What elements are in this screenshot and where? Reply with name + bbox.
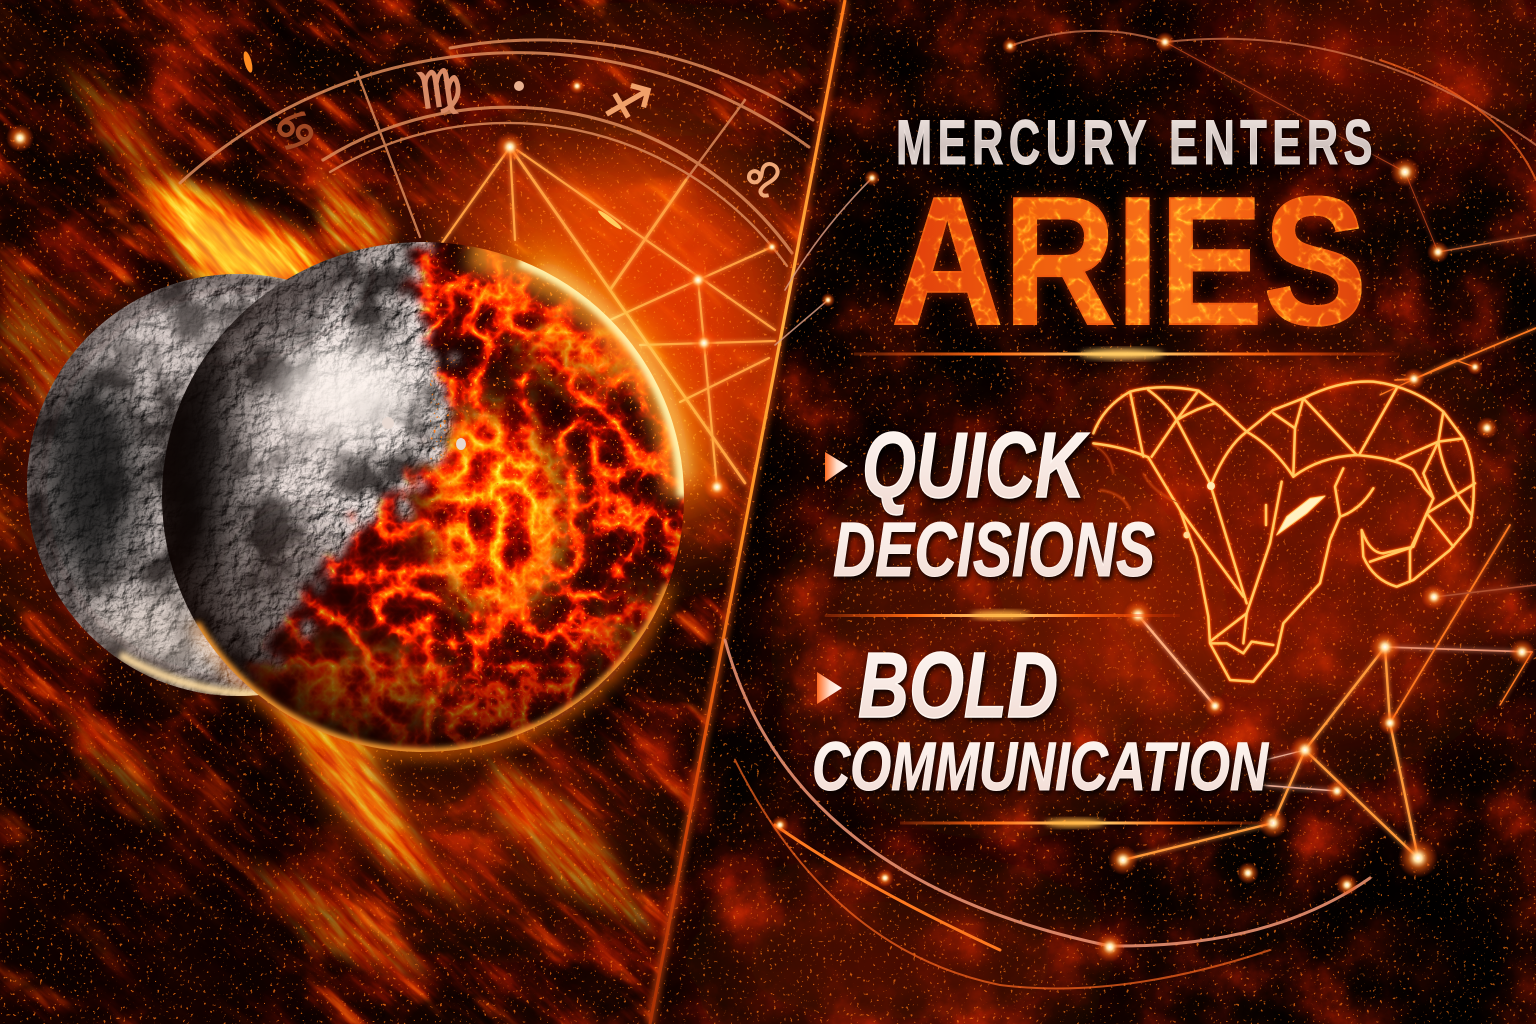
title: Aries: ARIES [891,158,1367,363]
wheel rings [180,40,813,266]
lower constellation lines [1123,42,1536,860]
lava specks [430,244,684,750]
grey rock surface [162,242,464,680]
right constellation stars [771,32,1535,962]
zodiac glyphs: ♌ [731,144,794,212]
text: Bold Communication [812,633,1270,805]
zodiac glyphs: ♋ [265,98,326,164]
text: Quick Decisions: QUICK [862,413,1089,517]
text: Quick Decisions [833,413,1155,593]
small comet lines [775,178,872,345]
right decorative orbits and constellation [725,31,1536,988]
panel: right dark zone [640,0,1536,1024]
icon: bullet arrow two [817,672,842,704]
divider beam [650,0,845,1024]
background: left cosmic fire panel [0,0,850,1024]
text: Bold Communication: BOLD [858,633,1058,737]
zodiac glyphs: ♍ [414,57,466,121]
lava surface [245,242,684,750]
zodiac glyphs [265,57,794,212]
fire burst and flame streaks [0,58,659,982]
back planet: grey Mercury [27,274,286,696]
sphere shading and rim [161,241,685,753]
constellation stars [6,50,780,500]
outer glow of molten planet [196,260,684,752]
text: Quick Decisions: DECISIONS [833,507,1155,593]
zodiac wheel with constellation [6,40,813,500]
text: Bold Communication: COMMUNICATION [812,728,1270,805]
constellation lines [442,147,775,487]
orbit arcs [725,31,1536,988]
divider between bullets [825,611,1180,619]
icon: bullet arrow one [825,452,848,482]
zodiac glyphs: ♐ [599,69,657,137]
icon: glowing ram head [1093,382,1475,682]
front planet: half rock, half lava [162,242,684,752]
divider under title [854,349,1400,359]
divider under bullets [900,819,1273,827]
